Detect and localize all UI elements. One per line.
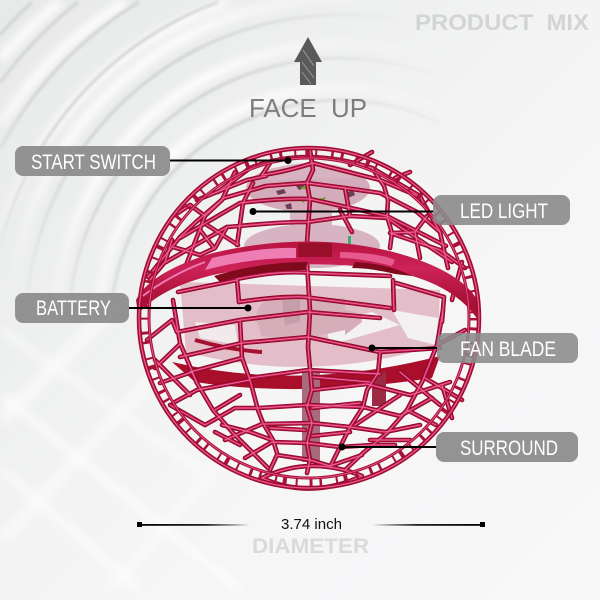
text: diameter value: 3.74 inch [281,517,342,533]
cage lattice [147,150,465,489]
callout: battery: BATTERY [36,297,111,320]
ball illustration [136,148,480,489]
diagonal streaks bottom left [2,300,240,590]
callout: start switch: START SWITCH [31,151,156,174]
dimension line [137,522,485,527]
callout: led light [250,195,570,225]
callout: led light: LED LIGHT [460,200,548,223]
callout: fan blade: FAN BLADE [460,338,556,361]
callout: battery [15,293,252,323]
text: diameter label: DIAMETER [252,535,369,558]
callout: surround: SURROUND [460,437,558,460]
text: product mix: PRODUCT MIX [415,10,589,35]
icon: up arrow [294,37,322,85]
horizontal ring [136,242,480,320]
text: face up: FACE UP [249,93,367,123]
center column [302,372,320,462]
motor top [244,163,380,268]
callout: start switch [15,146,292,176]
callout: surround [338,432,578,462]
curved ripples top left [0,0,404,293]
callout: fan blade [368,333,578,363]
cage outer rim [139,148,479,488]
center battery [256,298,362,340]
fan blade disc [172,282,440,389]
